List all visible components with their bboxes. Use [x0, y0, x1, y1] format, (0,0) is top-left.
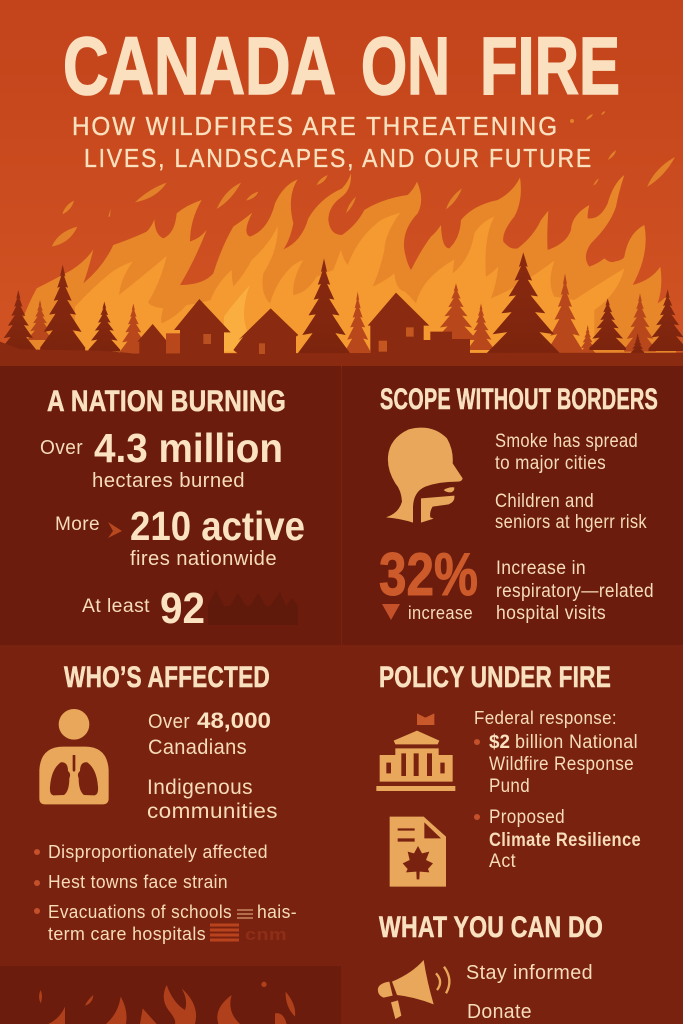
text: over 48,000 Canadians: 48,000 — [197, 708, 271, 733]
icon: government building — [376, 713, 455, 791]
text: children and seniors: seniors at hgerr risk — [495, 512, 647, 533]
stat: at least 92: At least — [82, 596, 150, 617]
text: climate resilience act: Proposed — [489, 807, 565, 828]
text: federal response: billion National — [515, 732, 638, 753]
subtitle: LIVES, LANDSCAPES, AND OUR FUTURE — [84, 143, 593, 173]
text: smoke — [495, 431, 638, 474]
text: federal response: Wildfire Response — [489, 754, 634, 775]
bullet list — [34, 841, 297, 944]
title — [63, 21, 620, 112]
bullet list: cnm — [245, 925, 287, 944]
icon: faint tree silhouette — [208, 590, 298, 625]
panel: scope without borders — [342, 366, 683, 645]
panel: who's affected — [0, 647, 341, 1024]
text: federal response: Pund — [489, 776, 530, 797]
text: over 48,000 Canadians: Canadians — [148, 736, 247, 759]
text: climate resilience act — [474, 807, 641, 872]
stat: 32 percent — [379, 541, 478, 623]
heading: A NATION BURNING — [47, 385, 286, 418]
subtitle: HOW WILDFIRES ARE THREATENING — [72, 111, 559, 141]
text: smoke: Smoke has spread — [495, 431, 638, 452]
text: actions: Donate — [467, 1001, 532, 1023]
stat: at least 92 — [82, 584, 205, 633]
panel: policy under fire — [342, 647, 683, 1024]
text: children and seniors: Children and — [495, 491, 594, 512]
title: CANADA — [63, 21, 336, 112]
bullet list: Evacuations of schools — [48, 901, 232, 922]
text: actions — [466, 962, 593, 1023]
heading: WHO’S AFFECTED — [64, 661, 270, 694]
panel: footer flames — [0, 966, 341, 1024]
stat: hectares burned — [40, 425, 283, 492]
icon: megaphone — [378, 960, 449, 1019]
heading: POLICY UNDER FIRE — [379, 661, 611, 694]
treeline: dark foreground trees and houses — [1, 252, 683, 357]
text: federal response: Federal response: — [474, 708, 617, 728]
text: hospital visits — [496, 558, 654, 624]
stat: hectares burned: hectares burned — [92, 470, 245, 492]
illustration: wildfire flames — [0, 173, 683, 367]
treeline: lighter background trees — [28, 273, 656, 355]
text: federal response — [474, 708, 638, 797]
panel: a nation burning — [0, 366, 341, 645]
stat: hectares burned: Over — [40, 437, 83, 459]
icon: person with lungs — [39, 709, 109, 804]
icon: triangle — [382, 604, 400, 620]
text: hospital visits: hospital visits — [496, 603, 606, 624]
stat: 32 percent: increase — [408, 603, 473, 623]
icon: document with maple leaf — [390, 817, 446, 887]
icon: head and airway — [386, 428, 463, 523]
text: Indigenous communities: communities — [147, 800, 278, 823]
stat: active fires — [55, 503, 305, 570]
stat: 32 percent: 32% — [379, 541, 478, 608]
text: federal response: $2 — [489, 732, 510, 753]
text: climate resilience act: Act — [489, 851, 516, 872]
bullet list: Hest towns face strain — [48, 871, 228, 892]
text: actions: Stay informed — [466, 962, 593, 984]
bullet list: Disproportionately affected — [48, 841, 268, 862]
text: hospital visits: Increase in — [496, 558, 586, 579]
title: ON — [361, 21, 450, 112]
stat: active fires: fires nationwide — [130, 548, 277, 570]
stat: hectares burned: 4.3 million — [94, 425, 283, 471]
text: hospital visits: respiratory—related — [496, 581, 654, 602]
heading: what you can do: WHAT YOU CAN DO — [379, 911, 603, 944]
embers near subtitle — [570, 111, 675, 187]
icon: arrow — [108, 522, 122, 538]
text: climate resilience act: Climate Resilience — [489, 830, 641, 851]
text: smoke: to major cities — [495, 453, 606, 474]
stat: active fires: More — [55, 514, 100, 535]
text: over 48,000 Canadians — [148, 708, 271, 759]
text: Indigenous communities: Indigenous — [147, 776, 253, 799]
panel: header — [0, 0, 683, 367]
bullet list: term care hospitals — [48, 923, 206, 944]
title: FIRE — [480, 21, 620, 112]
text: over 48,000 Canadians: Over — [148, 711, 190, 733]
stat: at least 92: 92 — [160, 584, 205, 633]
subtitle — [72, 111, 593, 173]
text: children and seniors — [495, 491, 647, 533]
stat: active fires: 210 active — [130, 503, 305, 549]
text: Indigenous communities — [147, 776, 278, 823]
bullet list: hais- — [257, 901, 297, 922]
